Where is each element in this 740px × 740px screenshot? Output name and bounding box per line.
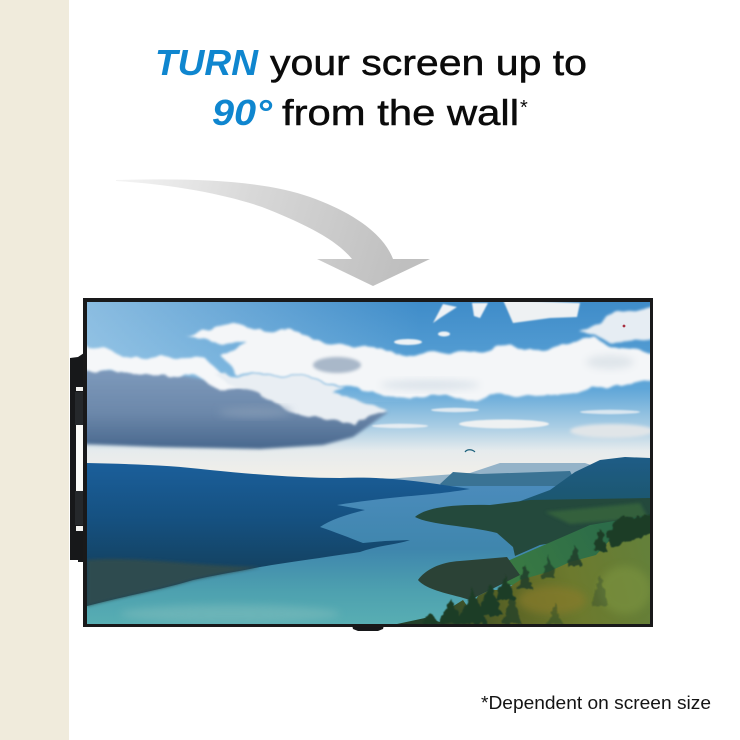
sky xyxy=(87,302,650,482)
curved arrow xyxy=(116,179,430,286)
paraglider xyxy=(465,450,475,452)
title: 90° xyxy=(212,92,273,133)
wall mount bracket xyxy=(70,353,84,562)
title xyxy=(155,42,587,133)
title: from the wall xyxy=(282,92,519,133)
village xyxy=(418,557,520,600)
red paraglider xyxy=(623,325,625,327)
screen bottom tab xyxy=(352,625,384,631)
beige wall band xyxy=(0,0,69,740)
screen frame xyxy=(83,298,653,627)
clouds xyxy=(80,300,660,449)
distant hills xyxy=(387,463,590,485)
television screen xyxy=(80,298,660,627)
forest foreground xyxy=(397,533,650,624)
title: TURN xyxy=(155,42,259,83)
right mountain xyxy=(520,457,650,502)
title: your screen up to xyxy=(270,42,587,83)
footnote: *Dependent on screen size xyxy=(481,693,711,713)
conifer trees xyxy=(422,514,655,624)
left mountain xyxy=(87,463,470,606)
landscape photo xyxy=(80,300,660,624)
middle slope xyxy=(505,515,650,585)
right peninsula xyxy=(415,498,650,556)
lake xyxy=(87,486,556,624)
title: * xyxy=(520,97,528,119)
